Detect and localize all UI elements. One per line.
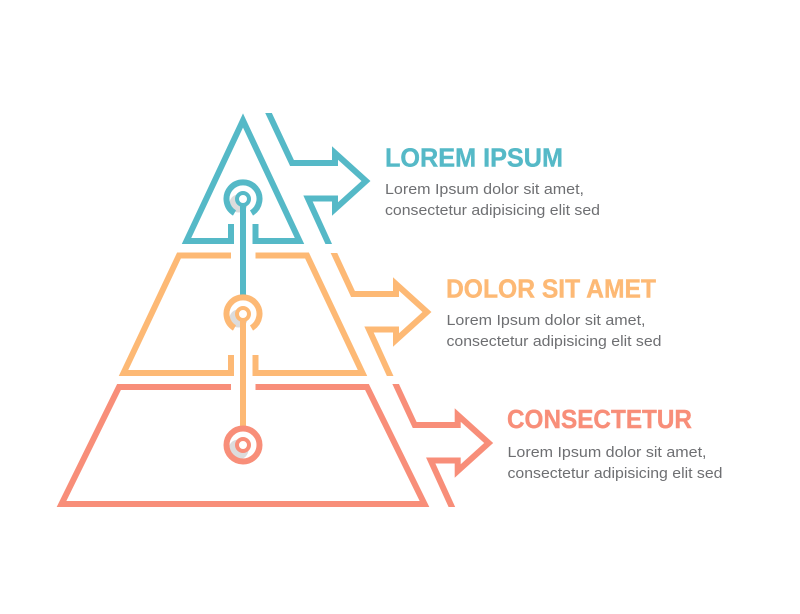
tier: top (blue) [186, 106, 600, 249]
tier: middle (orange) [124, 246, 662, 380]
text block: dolor sit amet description [446, 312, 662, 350]
pyramid tier: middle trapezoid [124, 256, 362, 373]
text block: consectetur description [508, 444, 722, 482]
tier: bottom (red) [62, 377, 722, 511]
text block: lorem ipsum description [385, 181, 600, 219]
text block: dolor sit amet description: consectetur adipisicing elit sed [446, 333, 662, 350]
pyramid tier: bottom trapezoid [62, 387, 424, 504]
node: red target [226, 428, 260, 462]
pyramid tier: triangle [186, 120, 300, 241]
heading: consectetur: CONSECTETUR [507, 404, 692, 434]
arrow: blue [265, 106, 366, 249]
heading: dolor sit amet: DOLOR SIT AMET [446, 274, 656, 304]
text block: lorem ipsum description: consectetur adipisicing elit sed [385, 202, 600, 219]
text block: dolor sit amet description: Lorem Ipsum dolor sit amet, [446, 312, 646, 329]
text block: consectetur description: Lorem Ipsum dolor sit amet, [508, 444, 706, 461]
arrow: red [392, 377, 489, 511]
node: orange target with connector [227, 297, 260, 427]
text block: lorem ipsum description: Lorem Ipsum dolor sit amet, [385, 181, 584, 198]
heading: lorem ipsum: LOREM IPSUM [385, 142, 563, 172]
arrow: orange [331, 246, 427, 380]
node: blue target with connector [227, 182, 260, 295]
text block: consectetur description: consectetur adipisicing elit sed [508, 465, 722, 482]
